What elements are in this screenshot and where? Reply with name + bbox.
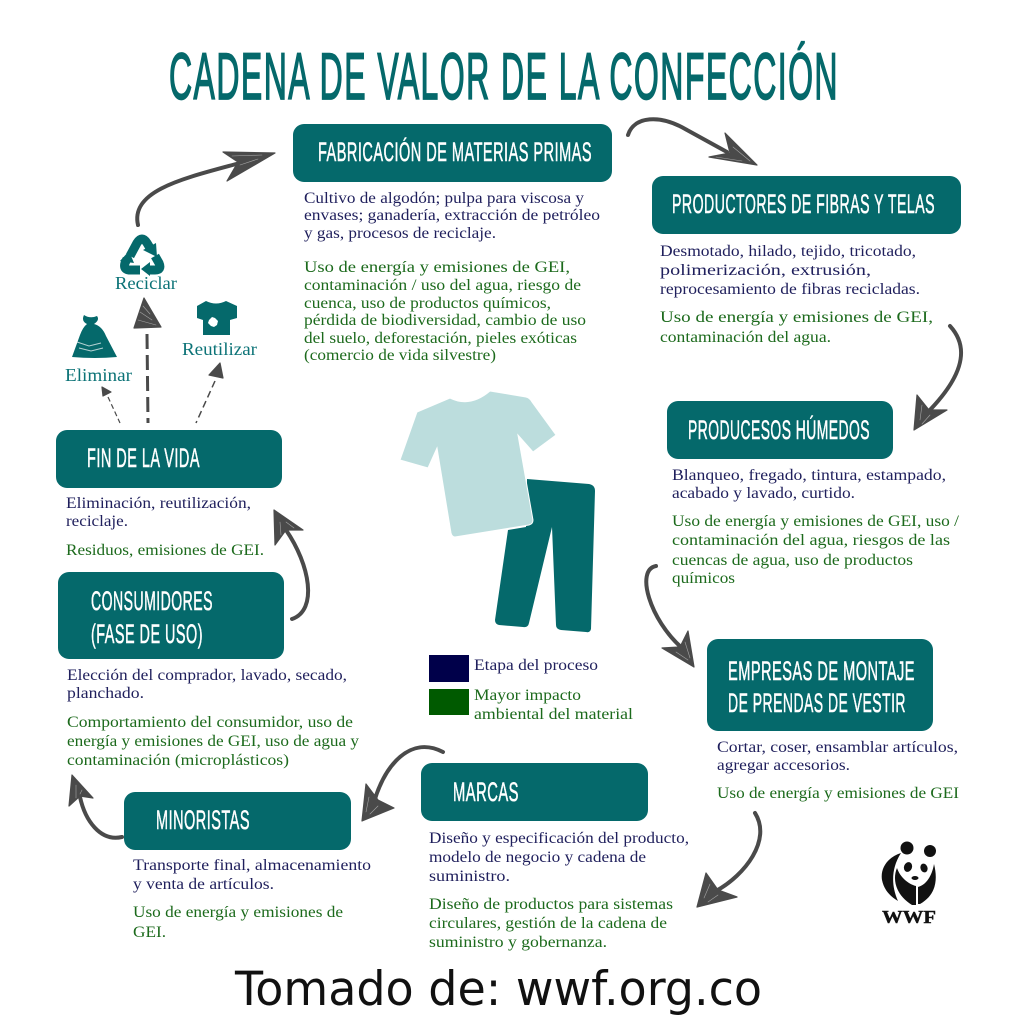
legend xyxy=(429,655,634,723)
panel: marcas: modelo de negocio y cadena de xyxy=(429,849,646,866)
icon: rubbish bag xyxy=(72,315,117,358)
panel: fabricación de materias primas: FABRICACIÓN DE MATERIAS PRIMAS xyxy=(318,136,592,167)
panel: productores de fibras y telas xyxy=(652,176,961,346)
panel: fin de la vida: Residuos, emisiones de GEI. xyxy=(66,542,264,559)
panel: marcas: suministro. xyxy=(429,868,510,885)
panel: fabricación de materias primas: envases; ganadería, extracción de petróleo xyxy=(304,207,600,224)
panel: fabricación de materias primas: contaminación / uso del agua, riesgo de xyxy=(304,277,581,294)
logo: WWF panda xyxy=(882,842,936,927)
icon: recycle xyxy=(120,239,160,276)
panel: consumidores: (FASE DE USO) xyxy=(91,619,203,649)
panel: empresas de montaje de prendas: Uso de energía y emisiones de GEI xyxy=(717,785,959,802)
arrow: to recycle xyxy=(134,298,161,423)
panel: procesos húmedos: químicos xyxy=(672,570,735,587)
source note: Tomado de: wwf.org.co xyxy=(234,962,762,1017)
panel: marcas: Diseño de productos para sistemas xyxy=(429,896,673,913)
panel: minoristas: Transporte final, almacenamiento xyxy=(133,857,371,874)
arrow: wet processes to assembly xyxy=(646,566,694,667)
panel: consumidores: Elección del comprador, lavado, secado, xyxy=(67,667,347,684)
panel: minoristas: MINORISTAS xyxy=(156,805,250,835)
panel: fin de la vida xyxy=(56,430,282,559)
panel: procesos húmedos: Blanqueo, fregado, tintura, estampado, xyxy=(672,467,946,484)
panel: fabricación de materias primas: Uso de energía y emisiones de GEI, xyxy=(304,259,570,276)
panel: productores de fibras y telas: Desmotado, hilado, tejido, tricotado, xyxy=(660,243,916,260)
arrow: to reuse xyxy=(196,363,223,423)
panel: fabricación de materias primas: del suelo, deforestación, pieles exóticas xyxy=(304,330,577,347)
panel: marcas: circulares, gestión de la cadena de xyxy=(429,915,667,932)
logo: WWF panda: WWF xyxy=(882,907,936,927)
panel: consumidores xyxy=(58,572,359,769)
icon: t-shirt reuse xyxy=(197,301,237,335)
panel: minoristas xyxy=(124,792,371,941)
panel: procesos húmedos: Uso de energía y emisiones de GEI, uso / xyxy=(672,513,960,530)
panel: minoristas: GEI. xyxy=(133,924,166,941)
panel: fabricación de materias primas: pérdida de biodiversidad, cambio de uso xyxy=(304,312,586,329)
panel: consumidores: Comportamiento del consumidor, uso de xyxy=(67,714,353,731)
panel: fabricación de materias primas: Cultivo de algodón; pulpa para viscosa y xyxy=(304,190,584,207)
illustration: t-shirt xyxy=(400,391,556,537)
panel: productores de fibras y telas: polimerización, extrusión, xyxy=(660,262,871,279)
panel: fabricación de materias primas: cuenca, uso de productos químicos, xyxy=(304,295,551,312)
panel: fabricación de materias primas xyxy=(293,124,612,364)
panel: procesos húmedos: cuencas de agua, uso de productos xyxy=(672,552,913,569)
panel: empresas de montaje de prendas: agregar accesorios. xyxy=(717,757,850,774)
arrow: fibres to wet processes xyxy=(914,326,961,430)
label: Eliminar: Eliminar xyxy=(65,365,132,385)
panel: consumidores: energía y emisiones de GEI, uso de agua y xyxy=(67,733,359,750)
panel: productores de fibras y telas: Uso de energía y emisiones de GEI, xyxy=(660,309,933,326)
panel: productores de fibras y telas: contaminación del agua. xyxy=(660,329,831,346)
panel: marcas: suministro y gobernanza. xyxy=(429,934,607,951)
arrow: brands to retailers xyxy=(362,747,443,821)
panel: minoristas: y venta de artículos. xyxy=(133,876,274,893)
panel: consumidores: contaminación (microplásticos) xyxy=(67,752,289,769)
illustration: trousers xyxy=(495,479,595,632)
panel: minoristas: Uso de energía y emisiones de xyxy=(133,904,343,921)
label: Reutilizar: Reutilizar xyxy=(182,339,257,359)
panel: marcas: Diseño y especificación del producto, xyxy=(429,830,689,847)
panel: procesos húmedos: contaminación del agua, riesgos de las xyxy=(672,532,950,549)
legend: Etapa del proceso xyxy=(474,657,598,674)
panel: consumidores: planchado. xyxy=(67,685,144,702)
arrow: reciclar to raw materials xyxy=(137,152,275,225)
panel: fin de la vida: FIN DE LA VIDA xyxy=(87,443,200,473)
panel: consumidores: CONSUMIDORES xyxy=(91,586,213,616)
panel: procesos húmedos: acabado y lavado, curtido. xyxy=(672,485,855,502)
legend: ambiental del material xyxy=(474,706,634,723)
panel: empresas de montaje de prendas: Cortar, coser, ensamblar artículos, xyxy=(717,739,958,756)
panel: marcas: MARCAS xyxy=(453,777,519,807)
panel: fin de la vida: reciclaje. xyxy=(66,513,128,530)
panel: productores de fibras y telas: reprocesamiento de fibras recicladas. xyxy=(660,281,920,298)
arrow: to discard xyxy=(102,387,120,423)
panel: fin de la vida: Eliminación, reutilización, xyxy=(66,495,251,512)
panel: procesos húmedos xyxy=(667,401,960,587)
legend: Mayor impacto xyxy=(474,687,581,704)
panel: marcas xyxy=(421,763,689,951)
panel: fabricación de materias primas: (comercio de vida silvestre) xyxy=(304,347,496,364)
arrow: raw materials to fibres xyxy=(628,119,757,165)
label: Reciclar: Reciclar xyxy=(115,273,177,293)
panel: empresas de montaje de prendas xyxy=(707,639,959,802)
arrow: consumers to end of life xyxy=(274,510,308,619)
arrow: retailers to consumers xyxy=(69,775,122,838)
panel: fabricación de materias primas: y gas, procesos de reciclaje. xyxy=(304,225,496,242)
arrow: assembly to brands xyxy=(697,813,760,907)
